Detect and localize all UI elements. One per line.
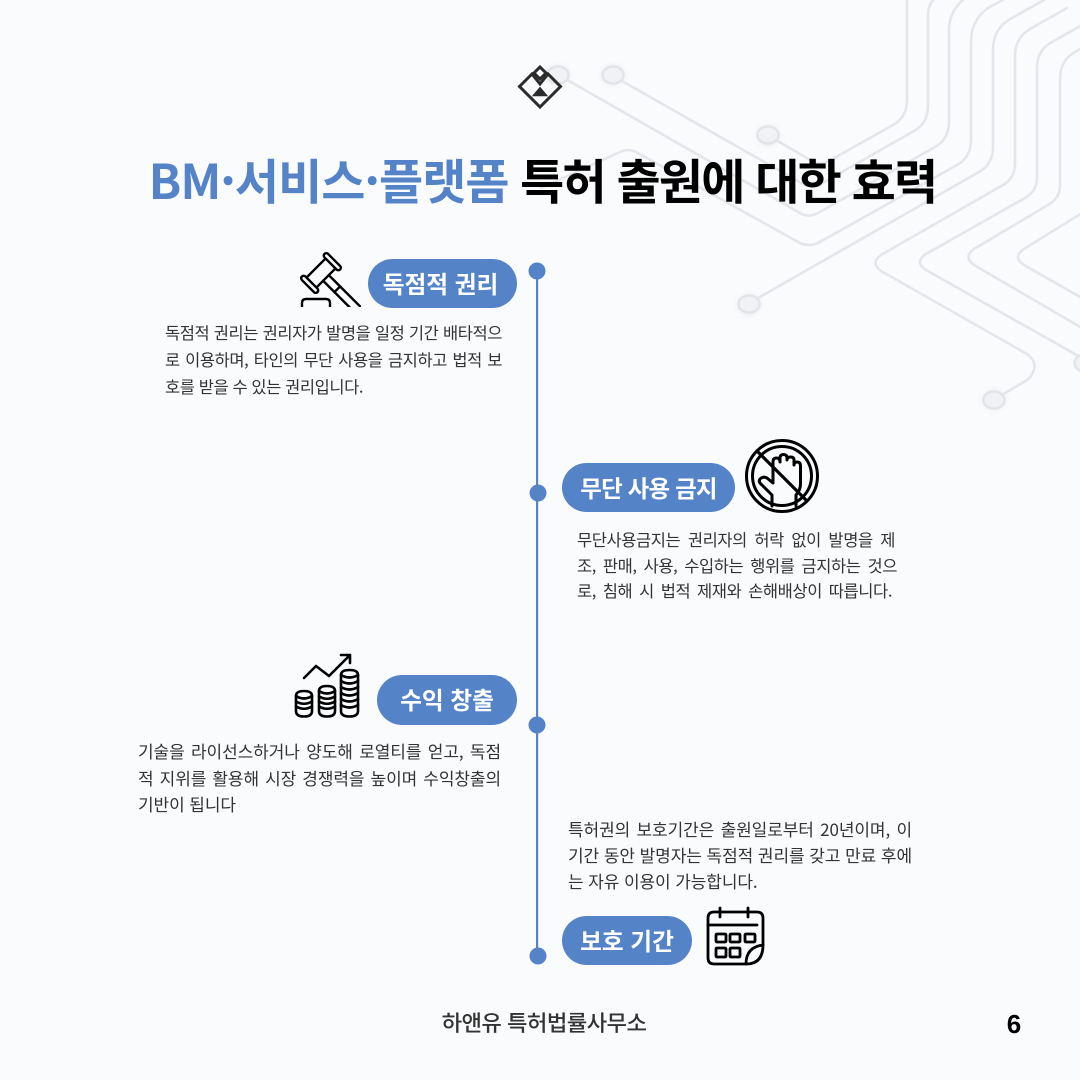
panel: 무단 사용 금지 (562, 439, 897, 602)
footer: page number: 6 (1007, 1009, 1021, 1039)
icon: prohibited hand (745, 439, 819, 513)
text block (568, 816, 912, 893)
label pill: 무단 사용 금지 (580, 470, 717, 504)
label pill: 보호 기간 (580, 923, 674, 957)
text block: 호를 받을 수 있는 권리입니다. (165, 374, 363, 398)
timeline (528, 262, 546, 964)
text block: 는 자유 이용이 가능합니다. (568, 868, 758, 893)
label pill (562, 463, 735, 512)
text block (165, 320, 502, 398)
icon: logo (518, 65, 562, 109)
label pill: 수익 창출 (400, 682, 494, 716)
text block: 무단사용금지는 권리자의 허락 없이 발명을 제 (577, 527, 895, 551)
text block: 기반이 됩니다 (138, 791, 236, 816)
title: BM·서비스·플랫폼 특허 출원에 대한 효력 (149, 143, 936, 213)
text block: 기간 동안 발명자는 독점적 권리를 갖고 만료 후에 (568, 842, 912, 867)
text block: 로 이용하며, 타인의 무단 사용을 금지하고 법적 보 (165, 347, 502, 371)
text block: 적 지위를 활용해 시장 경쟁력을 높이며 수익창출의 (138, 764, 501, 790)
label pill (377, 675, 517, 725)
text block: 특허권의 보호기간은 출원일로부터 20년이며, 이 (568, 816, 912, 841)
text block (577, 527, 897, 602)
text block: 기술을 라이선스하거나 양도해 로열티를 얻고, 독점 (138, 738, 501, 763)
label pill (368, 259, 517, 308)
panel: 독점적 권리 (165, 252, 517, 398)
icon: gavel (300, 252, 361, 307)
text block: 로, 침해 시 법적 제재와 손해배상이 따릅니다. (577, 578, 892, 602)
text block: 조, 판매, 사용, 수입하는 행위를 금지하는 것으 (577, 552, 897, 576)
text block (138, 738, 501, 816)
icon: calendar (706, 906, 764, 966)
icon: coins and growth arrow (294, 654, 360, 718)
text block: 독점적 권리는 권리자가 발명을 일정 기간 배타적으 (165, 320, 502, 344)
label pill: 독점적 권리 (383, 266, 498, 300)
label pill (562, 916, 692, 965)
footer: firm name: 하앤유 특허법률사무소 (442, 1006, 646, 1038)
panel: 보호 기간 (562, 816, 912, 966)
panel: 수익 창출 (138, 654, 517, 816)
